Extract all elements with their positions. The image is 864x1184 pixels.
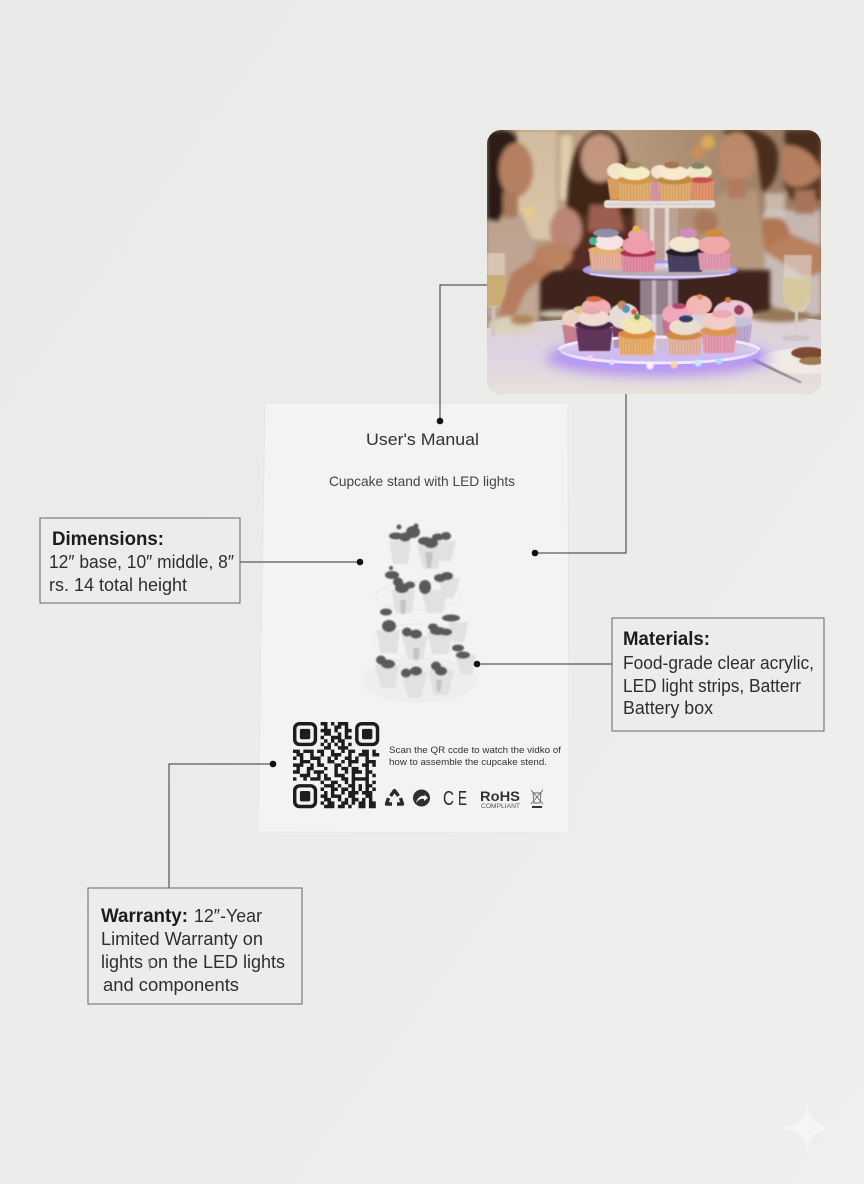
warm tone over the background xyxy=(487,130,821,320)
table with lilac glow xyxy=(487,313,821,394)
acrylic columns xyxy=(640,207,678,350)
connector: photo to manual page xyxy=(532,394,626,556)
text: QR code instructions: Scan the QR ccde to watch the vidko of xyxy=(389,745,561,756)
panel: user's manual sheet xyxy=(258,403,569,833)
icon: CE mark: E xyxy=(458,788,467,810)
top tier plate xyxy=(604,200,715,208)
plate with food and fork xyxy=(750,346,821,384)
icon: recycling symbol xyxy=(386,790,402,804)
connector: dimensions to stand xyxy=(240,559,363,565)
callout: materials xyxy=(612,618,824,731)
middle tier cupcakes xyxy=(588,226,731,272)
illustration: greyscale four-tier cupcake stand xyxy=(362,524,476,701)
icon: RoHS compliant mark: RoHS xyxy=(480,788,520,804)
photo: friends around a glowing three-tier cupcake stand xyxy=(487,129,851,394)
guest: woman in maroon xyxy=(540,130,770,320)
bottom tier LED ring xyxy=(558,337,760,368)
front row of bottom tier cupcakes xyxy=(575,308,738,355)
icon: green dot xyxy=(413,790,430,806)
connector: photo to manual title xyxy=(437,285,487,424)
callout: materials: Materials: xyxy=(623,629,710,650)
connector: warranty to QR code xyxy=(169,761,276,888)
text: QR code instructions xyxy=(389,745,561,768)
wine glass left xyxy=(487,253,506,336)
icon: CE mark: C xyxy=(443,788,454,810)
callout: warranty: and components xyxy=(103,975,239,995)
callout: warranty xyxy=(88,888,302,1004)
curtains and bokeh lights xyxy=(517,130,715,240)
wine glass right xyxy=(782,255,812,341)
icon: RoHS compliant mark xyxy=(480,788,520,810)
guest: woman on the left xyxy=(487,130,573,320)
callout: warranty: 12″-Year xyxy=(194,906,262,926)
middle tier LED ring xyxy=(584,262,736,278)
text: QR code instructions: how to assemble the cupcake stend. xyxy=(389,757,547,768)
LED glow xyxy=(546,340,770,376)
icon: CE mark xyxy=(443,788,467,810)
icon: sparkle watermark xyxy=(783,1104,831,1152)
heading: User's Manual: User's Manual xyxy=(366,431,479,449)
callout: materials: Battery box xyxy=(623,698,713,718)
callout: dimensions: 12″ base, 10″ middle, 8″ xyxy=(49,552,235,572)
callout: warranty: lights on the LED lights xyxy=(101,952,285,972)
callout: materials: Food-grade clear acrylic, xyxy=(623,653,814,673)
back row of bottom tier cupcakes xyxy=(562,294,753,348)
icon: WEEE crossed-out bin xyxy=(531,790,543,807)
callout: materials: LED light strips, Batterr xyxy=(623,676,801,696)
callout: dimensions xyxy=(40,518,240,603)
connector: materials to stand xyxy=(474,661,612,667)
callout: dimensions: Dimensions: xyxy=(52,529,164,550)
callout: warranty: Limited Warranty on xyxy=(101,929,263,949)
guest: man on the right xyxy=(760,130,821,318)
callout: dimensions: rs. 14 total height xyxy=(49,575,187,595)
icon: RoHS compliant mark: COMPLIANT xyxy=(481,803,520,810)
QR code xyxy=(293,724,379,807)
guest: woman in beige xyxy=(693,130,782,272)
top tier cupcakes xyxy=(607,162,714,201)
subtitle: product name: Cupcake stand with LED lights xyxy=(329,473,515,489)
callout: warranty: Warranty: xyxy=(101,906,188,927)
